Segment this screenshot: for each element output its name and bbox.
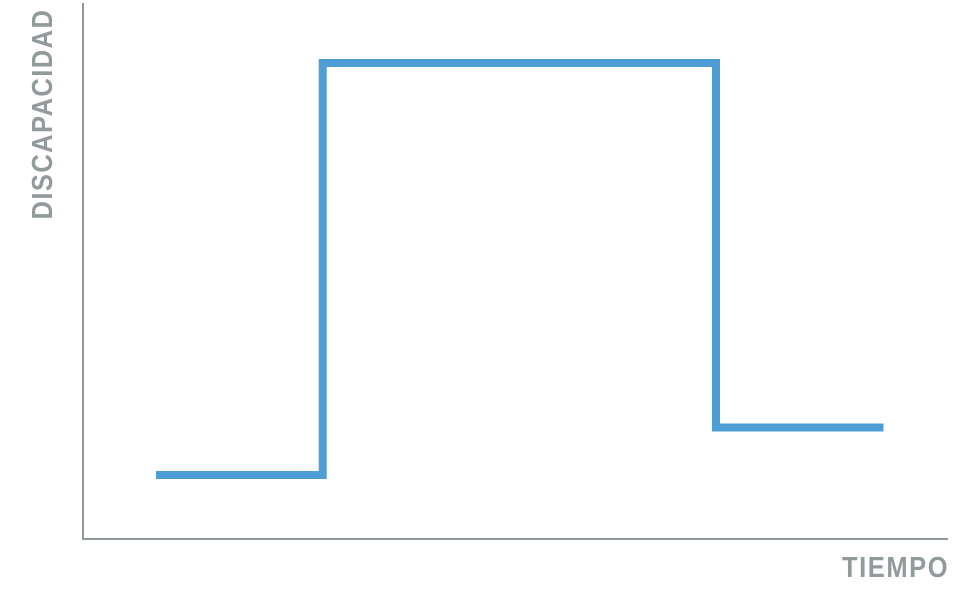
y-axis label: DISCAPACIDAD xyxy=(25,10,58,220)
blue disability line xyxy=(156,63,884,475)
x-axis label: TIEMPO xyxy=(842,550,948,583)
